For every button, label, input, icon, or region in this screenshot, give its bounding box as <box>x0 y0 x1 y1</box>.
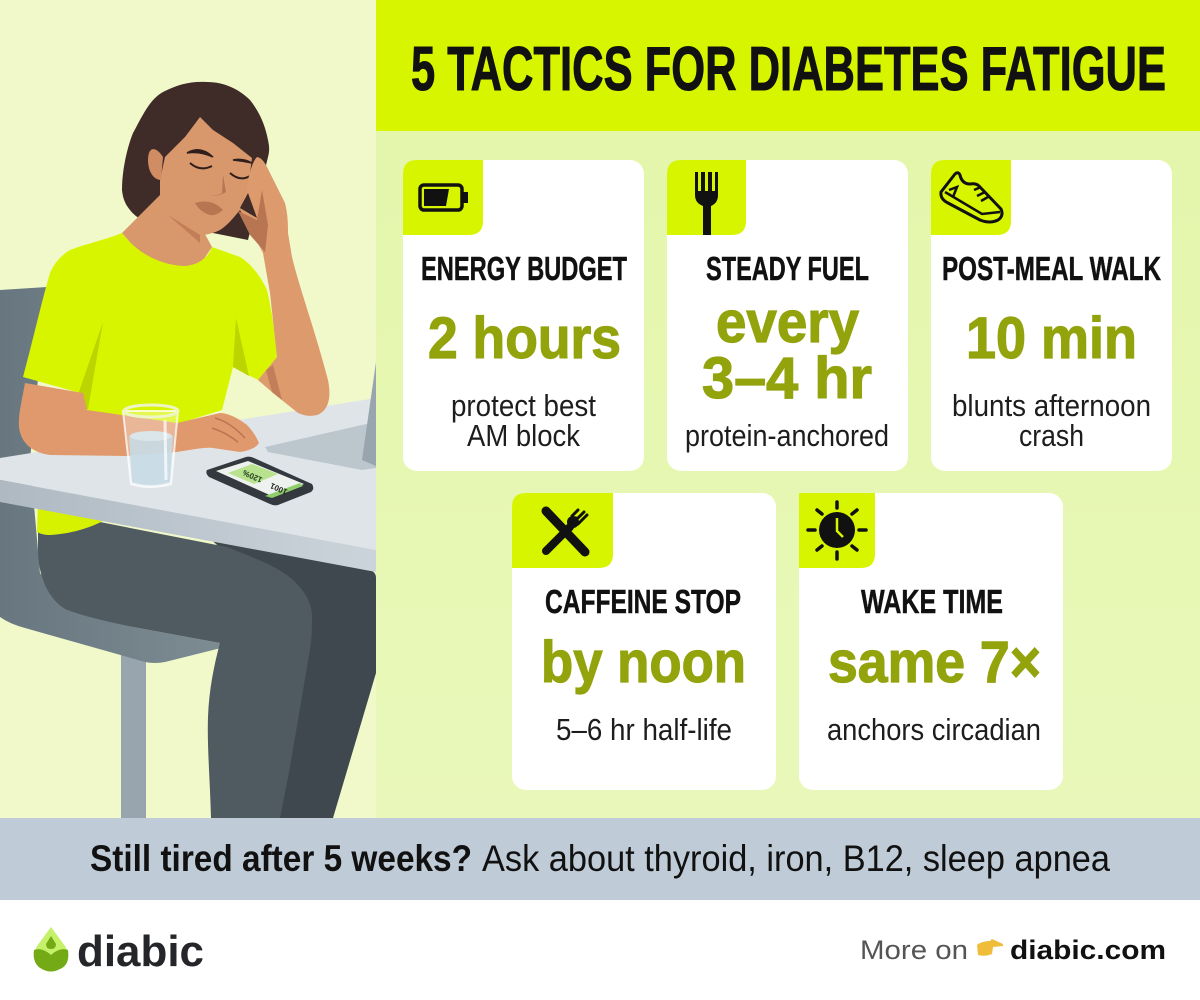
description: protein-anchored <box>685 418 889 453</box>
laptop <box>265 362 376 470</box>
trousers <box>38 522 376 818</box>
stat: 10 min <box>966 306 1137 371</box>
ear <box>148 149 163 180</box>
icon: pointing hand <box>977 939 1003 956</box>
eyes <box>190 163 250 178</box>
description: protect best <box>451 388 596 423</box>
stat: by noon <box>541 630 746 695</box>
desk <box>0 398 376 572</box>
icon: shoe <box>931 160 1011 235</box>
heading: WAKE TIME <box>861 583 1003 620</box>
shaded palm <box>238 190 268 252</box>
icon: sun clock <box>799 493 875 568</box>
jaw shade <box>168 215 200 243</box>
more on text: More on <box>860 935 968 965</box>
description: crash <box>1019 418 1084 453</box>
stat <box>702 290 872 411</box>
lower shirt <box>37 500 105 535</box>
face <box>148 117 252 243</box>
description <box>952 388 1151 453</box>
logo <box>34 927 204 976</box>
phone with glucose app: 1001 <box>268 481 289 496</box>
phone with glucose app: 120% <box>241 468 264 484</box>
sleeve shadow <box>266 365 282 400</box>
callout text: Ask about thyroid, iron, B12, sleep apnea <box>482 838 1110 879</box>
icon: drop <box>34 927 68 972</box>
phone with glucose app <box>206 457 313 505</box>
raised arm and hand <box>238 157 329 416</box>
description <box>451 388 596 453</box>
shirt <box>23 233 277 424</box>
hair <box>122 82 269 240</box>
mouth <box>195 202 223 215</box>
stat: every <box>716 290 859 355</box>
icon: crossed knife and fork <box>512 493 613 568</box>
nose <box>209 175 226 196</box>
chair <box>0 287 221 818</box>
footer <box>0 900 1200 1000</box>
stat: 2 hours <box>428 306 621 371</box>
stat: same 7× <box>828 630 1041 695</box>
card: energy budget <box>403 160 644 471</box>
description: blunts afternoon <box>952 388 1151 423</box>
callout band <box>0 818 1200 900</box>
site name: diabic.com <box>1010 935 1166 965</box>
card: post-meal walk <box>931 160 1172 471</box>
card: steady fuel <box>667 160 908 471</box>
brand name: diabic <box>77 927 204 976</box>
right background panel <box>376 131 1200 818</box>
neck <box>122 195 212 267</box>
icon: battery <box>403 160 483 235</box>
resting arm <box>19 383 259 456</box>
gap of hair by the hand <box>240 193 257 218</box>
heading: ENERGY BUDGET <box>421 250 627 287</box>
eyebrows <box>187 150 252 163</box>
link <box>860 935 1166 965</box>
description: 5–6 hr half-life <box>556 712 732 747</box>
stat: 3–4 hr <box>702 346 872 411</box>
description: anchors circadian <box>827 712 1041 747</box>
heading: CAFFEINE STOP <box>545 583 741 620</box>
callout bold text: Still tired after 5 weeks? <box>90 838 472 879</box>
heading: STEADY FUEL <box>706 250 869 287</box>
card: caffeine stop <box>512 493 776 790</box>
glass of water <box>123 405 178 487</box>
card: wake time <box>799 493 1063 790</box>
illustration: tired woman at desk <box>0 82 376 818</box>
description: AM block <box>467 418 580 453</box>
left background panel <box>0 0 376 818</box>
title band <box>376 0 1200 131</box>
icon: fork <box>667 160 746 235</box>
